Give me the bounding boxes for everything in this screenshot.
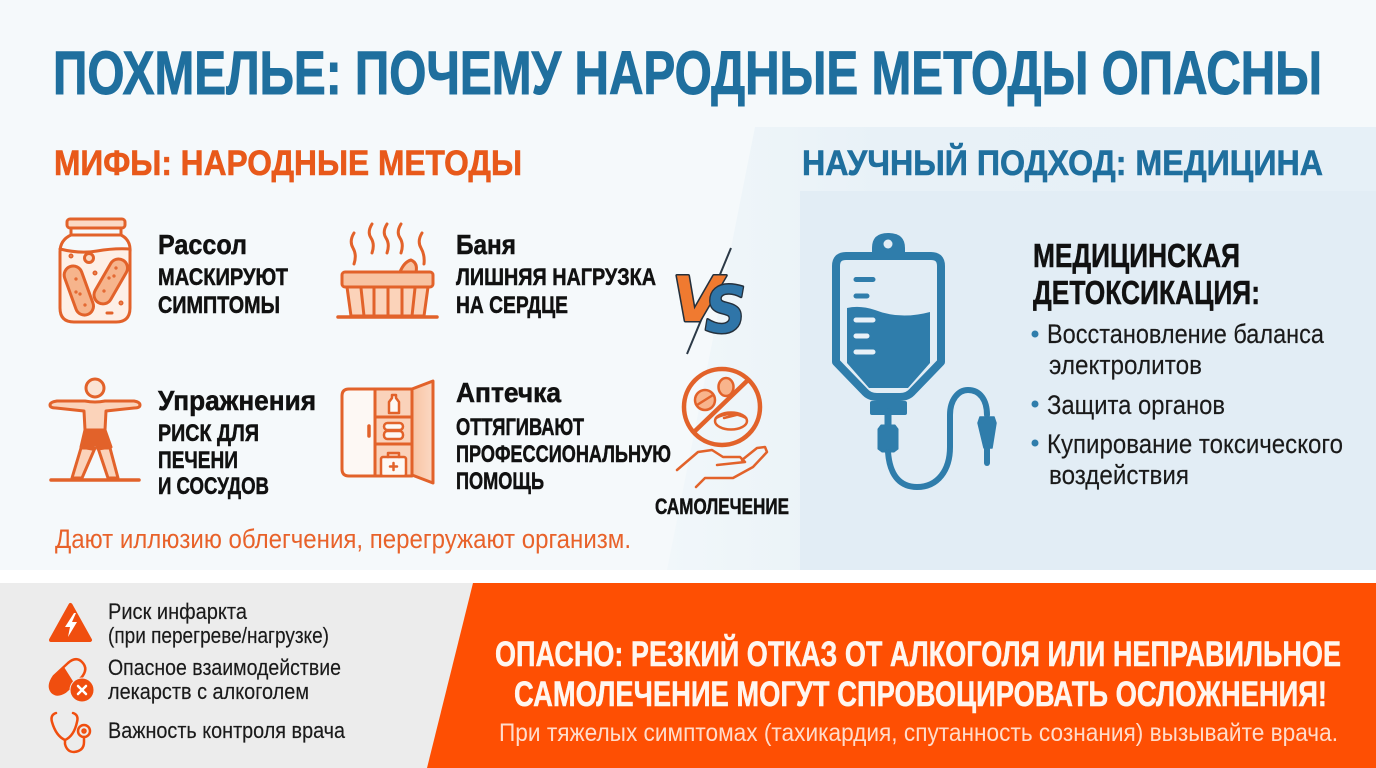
icon: warning lightning xyxy=(51,605,90,640)
panel: science xyxy=(802,143,1343,490)
text: exercise: РИСК ДЛЯ xyxy=(158,420,259,447)
icon: versus mark: V xyxy=(672,263,727,336)
icon: versus mark: S xyxy=(705,274,746,348)
text: exercise: И СОСУДОВ xyxy=(158,473,269,500)
icon: pill with cross xyxy=(50,659,94,702)
icon: iv drip bag xyxy=(836,233,996,487)
text: first aid cabinet: Аптечка xyxy=(456,377,561,408)
text: rassol: СИМПТОМЫ xyxy=(158,292,280,319)
text: drug interaction: Опасное взаимодействие xyxy=(108,655,341,680)
text: banya xyxy=(456,229,656,319)
panel: myths xyxy=(50,144,671,554)
text: medical detox: воздействия xyxy=(1049,460,1189,490)
text: exercise xyxy=(158,385,316,500)
icon: no self-medication xyxy=(677,369,767,487)
text: medical detox: электролитов xyxy=(1049,350,1202,380)
text: rassol: Рассол xyxy=(158,229,247,260)
text: first aid cabinet: ПОМОЩЬ xyxy=(456,468,544,495)
text: banya: НА СЕРДЦЕ xyxy=(456,292,568,319)
heading: science: НАУЧНЫЙ ПОДХОД: МЕДИЦИНА xyxy=(802,143,1323,183)
text: doctor control: Важность контроля врача xyxy=(108,718,346,743)
text: heart attack risk xyxy=(108,599,329,648)
icon: exercising person xyxy=(50,379,140,480)
icon: bath tub xyxy=(338,224,437,317)
text: rassol xyxy=(158,229,288,319)
text: exercise: ПЕЧЕНИ xyxy=(158,447,238,474)
text: drug interaction: лекарств с алкоголем xyxy=(108,679,309,704)
text: medical detox: Купирование токсического xyxy=(1047,429,1343,459)
panel: danger warning xyxy=(427,583,1376,768)
panel: risks xyxy=(0,583,480,768)
text: exercise: Упражнения xyxy=(158,385,316,416)
icon: stethoscope xyxy=(52,713,90,752)
text: first aid cabinet: ПРОФЕССИОНАЛЬНУЮ xyxy=(456,441,671,468)
text: medical detox: МЕДИЦИНСКАЯ xyxy=(1033,237,1240,274)
icon: medicine cabinet xyxy=(342,381,433,483)
text: drug interaction xyxy=(108,655,341,704)
heading: myths: МИФЫ: НАРОДНЫЕ МЕТОДЫ xyxy=(54,144,522,183)
text: medical detox xyxy=(1032,237,1343,490)
text: rassol: МАСКИРУЮТ xyxy=(158,264,288,291)
text: first aid cabinet xyxy=(456,377,671,495)
text: medical detox: Защита органов xyxy=(1047,390,1225,420)
text: heart attack risk: Риск инфаркта xyxy=(108,599,248,624)
text: banya: Баня xyxy=(456,229,516,260)
icon: versus mark xyxy=(672,248,746,354)
text: banya: ЛИШНЯЯ НАГРУЗКА xyxy=(456,264,656,291)
text: medical detox: Восстановление баланса xyxy=(1047,319,1325,349)
text: first aid cabinet: ОТТЯГИВАЮТ xyxy=(456,414,584,441)
label: self-medication: САМОЛЕЧЕНИЕ xyxy=(655,494,789,519)
text: heart attack risk: (при перегреве/нагрузке) xyxy=(108,623,329,648)
text: medical detox: ДЕТОКСИКАЦИЯ: xyxy=(1033,274,1260,311)
caption: illusion of relief: Дают иллюзию облегчения, перегружают организм. xyxy=(55,524,631,554)
icon: pickle jar xyxy=(60,219,131,322)
